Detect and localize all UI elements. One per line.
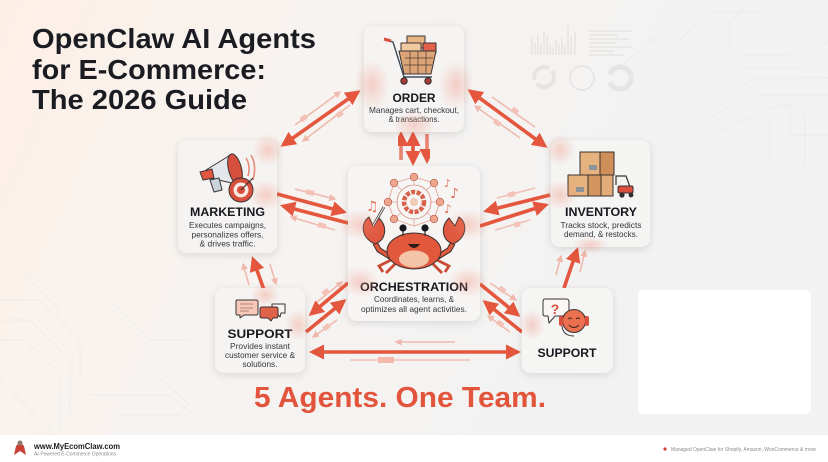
support description: Provides instant — [230, 342, 291, 351]
inventory description — [560, 221, 642, 239]
marketing description: personalizes offers, — [192, 230, 264, 240]
icon: megaphone and target — [200, 152, 255, 202]
support description: solutions. — [242, 360, 278, 369]
footer logo — [14, 440, 26, 455]
marketing description — [189, 221, 266, 248]
icon: shopping cart — [384, 36, 436, 84]
arrows: support and orchestration — [306, 282, 348, 337]
marketing description: & drives traffic. — [200, 240, 256, 248]
footer subtitle: AI-Powered E-Commerce Operations — [34, 452, 116, 458]
panel: orchestration hub — [348, 166, 480, 321]
footer website: www.MyEcomClaw.com — [33, 441, 120, 451]
arrows: support and inventory — [556, 250, 585, 288]
orchestration description: optimizes all agent activities. — [361, 305, 467, 314]
icon: help bubble and headset face: ? — [551, 301, 559, 317]
arrows: order and marketing — [283, 92, 358, 145]
orchestration heading: ORCHESTRATION — [360, 280, 468, 294]
panel: marketing agent — [178, 140, 277, 253]
inventory heading: INVENTORY — [565, 205, 637, 219]
arrows: orchestration and support — [480, 283, 522, 332]
title: OpenClaw AI Agents — [32, 23, 316, 54]
order description: Manages cart, checkout, — [369, 106, 459, 115]
blank white panel — [638, 290, 811, 414]
icon: crab mascot — [363, 207, 465, 273]
tagline: 5 Agents. One Team. — [254, 382, 546, 414]
support description — [225, 342, 296, 369]
icon: chat bubbles — [236, 300, 285, 321]
icon: music notes — [366, 177, 459, 216]
panel: inventory agent — [551, 140, 650, 247]
panel: second support agent — [522, 288, 613, 373]
support description: customer service & — [225, 351, 296, 360]
order description — [369, 106, 459, 124]
inventory description: demand, & restocks. — [564, 230, 638, 239]
inventory description: Tracks stock, predicts — [560, 221, 642, 230]
arrows: support to support — [312, 342, 518, 363]
orchestration description — [361, 295, 467, 314]
icon: boxes and forklift — [568, 152, 633, 198]
panel: customer support agent — [215, 288, 305, 373]
marketing heading: MARKETING — [190, 205, 265, 219]
arrows: order and orchestration — [401, 134, 427, 163]
orchestration description: Coordinates, learns, & — [374, 295, 455, 304]
icon: music notes: ♪ — [444, 177, 451, 190]
icon: music notes: ♪ — [450, 186, 459, 202]
order heading: ORDER — [392, 91, 436, 105]
panel: order agent — [364, 26, 464, 132]
support heading: SUPPORT — [228, 327, 293, 341]
icon: music notes: ♫ — [366, 199, 379, 215]
circuit pattern: top right — [610, 8, 828, 165]
marketing description: Executes campaigns, — [189, 221, 266, 230]
title — [32, 23, 316, 115]
arrows: order and inventory — [470, 91, 545, 146]
title: for E-Commerce: — [32, 54, 266, 85]
arrows: support and marketing — [243, 259, 276, 290]
order description: & transactions. — [388, 115, 440, 124]
second support heading: SUPPORT — [538, 346, 597, 360]
decorative chart thumbnails — [532, 26, 632, 90]
arrow entry glows — [248, 59, 608, 341]
icon: agent network and gear — [384, 173, 444, 226]
circuit pattern: bottom left — [0, 270, 200, 435]
icon: music notes: ♪ — [444, 202, 452, 216]
footer bar — [0, 435, 828, 462]
arrows: marketing and orchestration — [277, 189, 348, 230]
arrows: inventory and orchestration — [480, 188, 550, 230]
title: The 2026 Guide — [32, 84, 247, 115]
